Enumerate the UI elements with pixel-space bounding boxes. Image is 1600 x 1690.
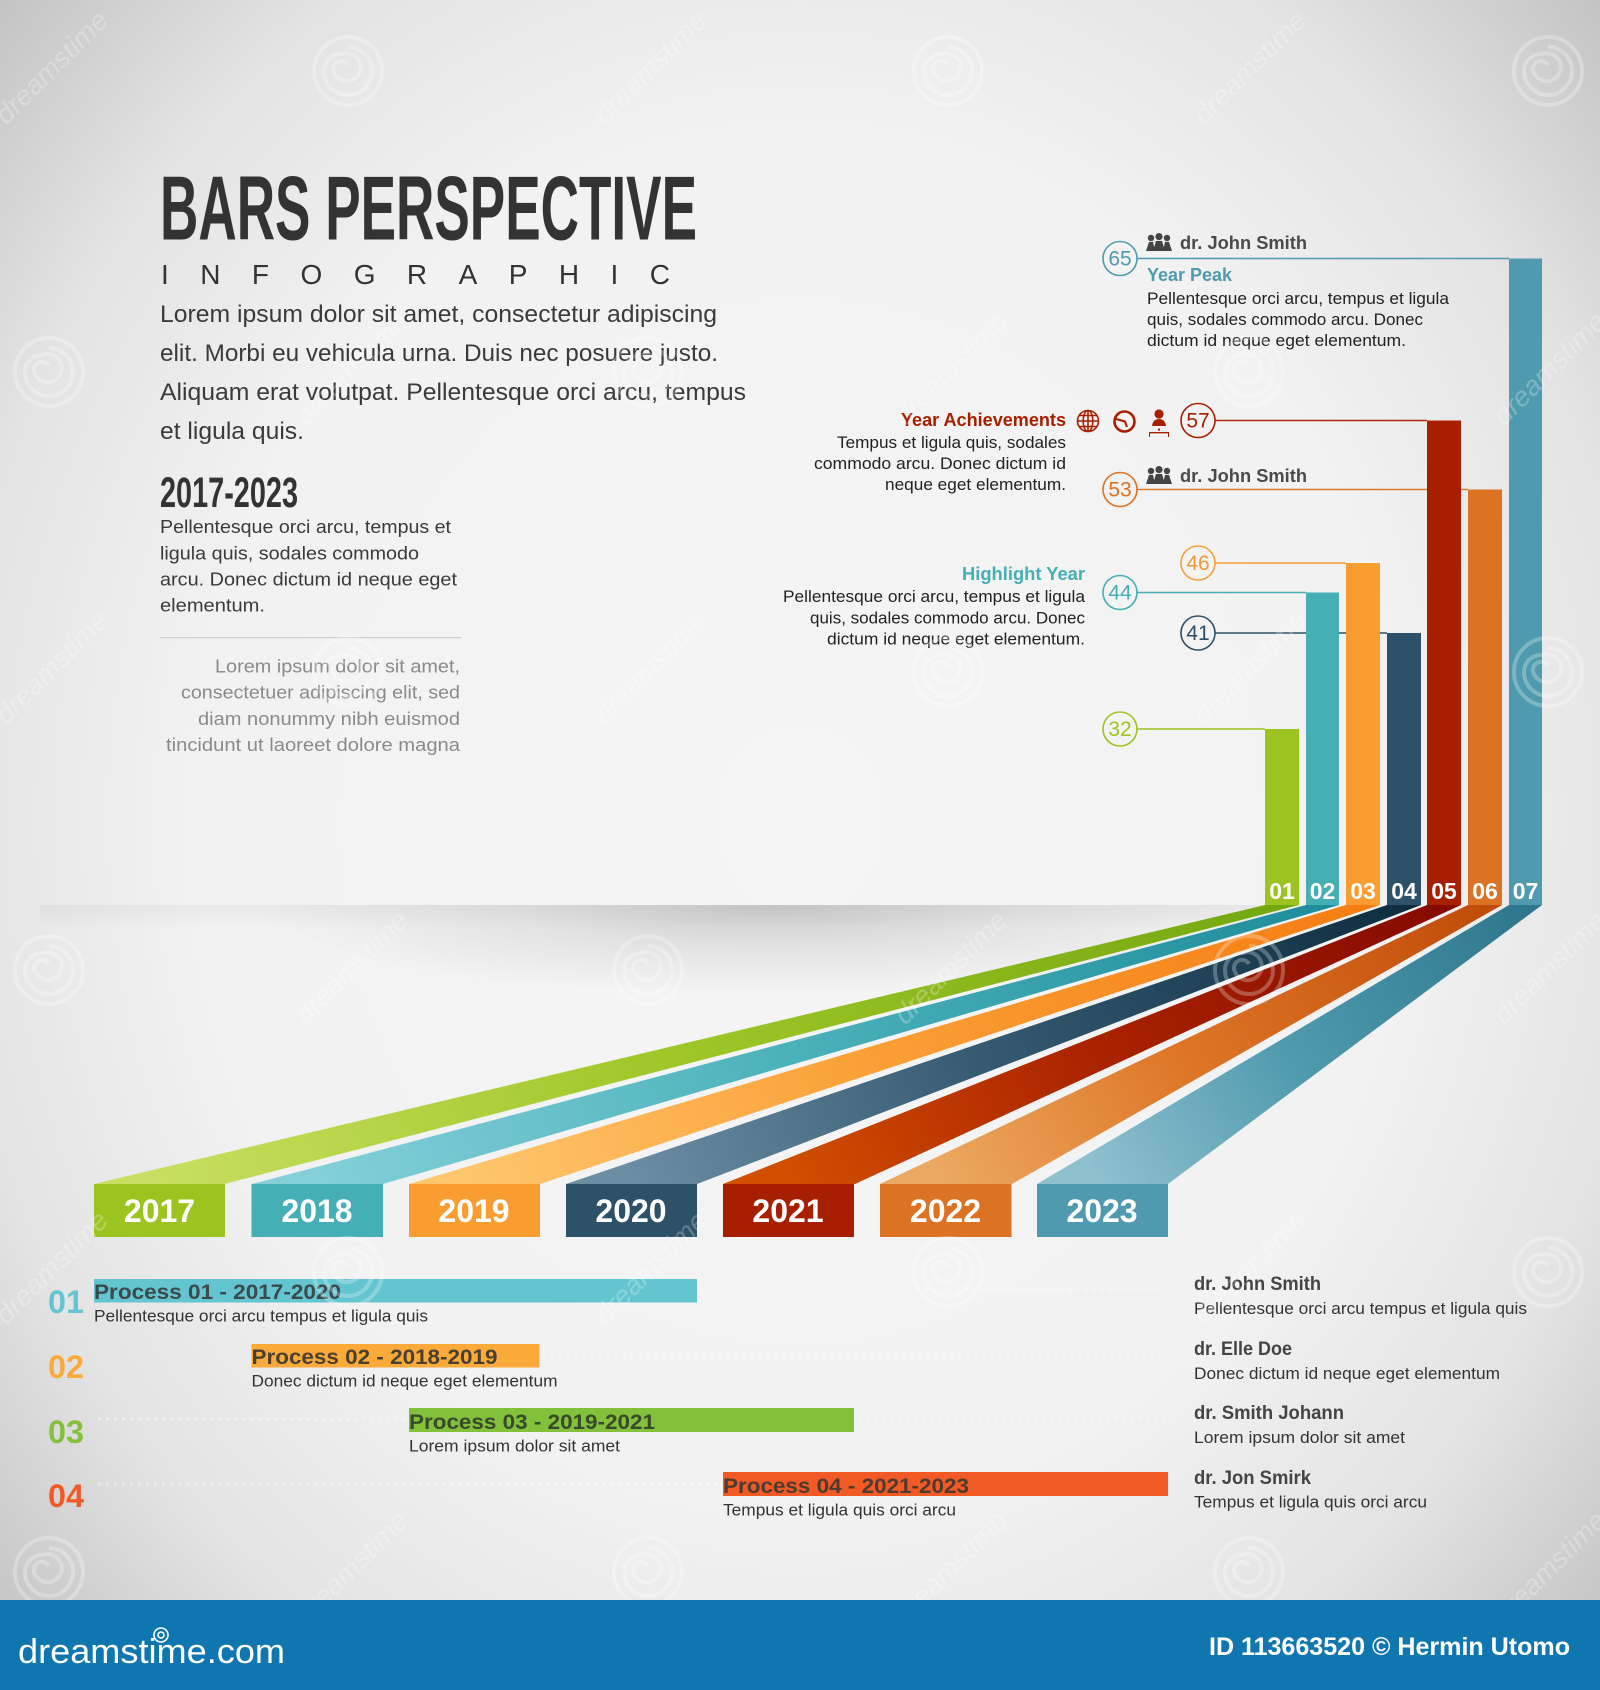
callout: dr. John Smith, Year Peak <box>1146 232 1450 350</box>
bar 07: 07 <box>1513 878 1538 904</box>
tab 2018 <box>252 1184 383 1237</box>
tab 2020 <box>566 1184 697 1237</box>
intro paragraph <box>160 301 746 445</box>
value badge 65: 65 <box>1108 248 1132 270</box>
tab 2021: 2021 <box>752 1193 824 1229</box>
description: quis, sodales commodo arcu. Donec <box>1147 311 1423 329</box>
watermark: dreamstime <box>888 306 1013 431</box>
bar 02: 02 <box>1310 878 1335 904</box>
description: Pellentesque orci arcu, tempus et ligula <box>1147 290 1450 308</box>
person 3: Lorem ipsum dolor sit amet <box>1194 1429 1405 1447</box>
bar 02 <box>1306 592 1339 905</box>
description: quis, sodales commodo arcu. Donec <box>810 610 1085 628</box>
person 3: dr. Smith Johann <box>1194 1403 1344 1424</box>
callout: Highlight Year <box>783 563 1086 648</box>
bar 06 <box>1468 490 1502 905</box>
watermark: dreamstime <box>888 1505 1013 1630</box>
panel edge shadow <box>40 905 1400 1005</box>
bar 01 <box>1265 729 1299 905</box>
icon: globe <box>1078 410 1098 432</box>
watermark: dreamstime <box>588 605 713 730</box>
person 1 <box>1194 1274 1527 1318</box>
process text: Pellentesque orci arcu tempus et ligula quis <box>94 1308 428 1326</box>
process text: Lorem ipsum dolor sit amet <box>409 1438 620 1456</box>
description <box>1147 290 1450 350</box>
value badge 57 <box>1181 404 1215 438</box>
vertical bar chart <box>1265 258 1542 905</box>
process label: Process 02 - 2018-2019 <box>252 1346 498 1369</box>
value badge 57: 57 <box>1186 410 1210 432</box>
row number: 01 <box>48 1284 84 1320</box>
description: neque eget elementum. <box>885 476 1066 494</box>
person 3 <box>1194 1403 1405 1447</box>
watermark: dreamstime <box>1187 1205 1312 1330</box>
value badge 44 <box>1103 576 1137 610</box>
tab 2023: 2023 <box>1066 1193 1138 1229</box>
icon: people <box>1146 466 1172 484</box>
bar 05: 05 <box>1431 878 1457 904</box>
description: dictum id neque eget elementum. <box>827 630 1085 648</box>
person 2: dr. Elle Doe <box>1194 1339 1292 1360</box>
bar 03: 03 <box>1350 878 1376 904</box>
title: BARS PERSPECTIVE <box>160 158 697 260</box>
process row 04 <box>48 1472 1168 1520</box>
value badge 32: 32 <box>1108 718 1132 741</box>
date range text: ligula quis, sodales commodo <box>160 542 419 564</box>
watermark: dreamstime <box>289 306 414 431</box>
value badge 53: 53 <box>1108 478 1132 502</box>
process label: Process 04 - 2021-2023 <box>723 1475 969 1498</box>
tab 2018: 2018 <box>281 1193 353 1229</box>
process label: Process 01 - 2017-2020 <box>94 1281 341 1304</box>
icon: logo spiral <box>154 1628 168 1642</box>
date range heading: 2017-2023 <box>160 469 298 517</box>
row number: 04 <box>48 1478 84 1514</box>
description: Tempus et ligula quis, sodales <box>837 434 1066 452</box>
name: dr. John Smith <box>1180 232 1307 253</box>
tab 2022: 2022 <box>910 1193 981 1229</box>
bar 04: 04 <box>1391 878 1417 904</box>
process bar <box>723 1472 1168 1496</box>
year tabs <box>94 1184 1168 1237</box>
icon: user at desk <box>1149 409 1169 437</box>
bar 03 <box>1346 563 1380 905</box>
date range text <box>160 516 457 616</box>
value badge 41: 41 <box>1186 622 1210 645</box>
row number: 03 <box>48 1414 84 1450</box>
process label: Process 03 - 2019-2021 <box>409 1411 655 1434</box>
name: dr. John Smith <box>1180 465 1307 486</box>
value badge 32 <box>1103 712 1137 746</box>
icon: people <box>1146 233 1172 251</box>
person 1: Pellentesque orci arcu tempus et ligula quis <box>1194 1300 1527 1318</box>
tab 2022 <box>880 1184 1012 1237</box>
person 1: dr. John Smith <box>1194 1274 1321 1295</box>
tab 2021 <box>723 1184 854 1237</box>
icon: clock <box>1114 412 1134 432</box>
tab 2023 <box>1037 1184 1168 1237</box>
process bar <box>409 1408 854 1432</box>
process bar <box>94 1279 697 1302</box>
footer bar <box>0 1600 1600 1690</box>
person 4: Tempus et ligula quis orci arcu <box>1194 1494 1427 1512</box>
process text: Donec dictum id neque eget elementum <box>252 1372 558 1390</box>
value badge 46: 46 <box>1186 552 1210 575</box>
grey quote text: tincidunt ut laoreet dolore magna <box>166 734 461 755</box>
subtitle: INFOGRAPHIC <box>161 259 670 290</box>
process text: Tempus et ligula quis orci arcu <box>723 1502 956 1520</box>
watermark: dreamstime <box>289 1505 414 1630</box>
people list <box>1194 1274 1527 1512</box>
value badge 53 <box>1103 472 1137 506</box>
description <box>814 434 1066 494</box>
description: Pellentesque orci arcu, tempus et ligula <box>783 588 1086 606</box>
watermark: dreamstime <box>588 1205 713 1330</box>
date range text: elementum. <box>160 594 265 616</box>
value badge 44: 44 <box>1108 582 1132 604</box>
watermark: dreamstime <box>888 905 1013 1030</box>
person 2: Donec dictum id neque eget elementum <box>1194 1365 1500 1383</box>
callout: dr. John Smith second <box>1146 465 1307 486</box>
date range text: arcu. Donec dictum id neque eget <box>160 568 457 590</box>
description: dictum id neque eget elementum. <box>1147 332 1406 350</box>
description: commodo arcu. Donec dictum id <box>814 455 1066 473</box>
person 4 <box>1194 1468 1427 1512</box>
process bar <box>252 1344 540 1368</box>
description <box>783 588 1086 648</box>
value badge 41 <box>1181 616 1215 650</box>
intro paragraph: elit. Morbi eu vehicula urna. Duis nec posuere justo. <box>160 340 718 367</box>
bar 05 <box>1427 420 1461 905</box>
value badge 46 <box>1181 546 1215 580</box>
date range text: Pellentesque orci arcu, tempus et <box>160 516 451 537</box>
person 2 <box>1194 1339 1500 1383</box>
callout leader lines <box>1137 258 1509 729</box>
bar 07 <box>1509 258 1542 905</box>
grey quote text: consectetuer adipiscing elit, sed <box>181 682 460 702</box>
person 4: dr. Jon Smirk <box>1194 1468 1311 1489</box>
bar 01: 01 <box>1269 878 1295 904</box>
tab 2017: 2017 <box>124 1193 195 1229</box>
grey quote text <box>166 656 461 755</box>
watermark: dreamstime <box>588 5 713 130</box>
perspective ribbons <box>94 905 1542 1184</box>
intro paragraph: et ligula quis. <box>160 418 304 445</box>
row number: 02 <box>48 1349 84 1385</box>
intro paragraph: Lorem ipsum dolor sit amet, consectetur adipiscing <box>160 301 717 328</box>
heading: Year Achievements <box>901 409 1066 430</box>
tab 2019 <box>409 1184 540 1237</box>
tab 2017 <box>94 1184 225 1237</box>
tab 2020: 2020 <box>595 1193 667 1229</box>
value badge 65 <box>1103 242 1137 276</box>
grey quote text: diam nonummy nibh euismod <box>198 708 460 729</box>
heading: Year Peak: Year Peak <box>1147 264 1233 285</box>
heading: Highlight Year <box>962 563 1085 584</box>
watermark: dreamstime <box>289 905 414 1030</box>
process row 01 <box>48 1279 697 1326</box>
footer logo: dreamstime.com <box>18 1633 285 1671</box>
process row 02 <box>48 1344 558 1390</box>
tab 2019: 2019 <box>438 1193 510 1229</box>
grey quote text: Lorem ipsum dolor sit amet, <box>215 656 460 676</box>
bar 04 <box>1387 633 1421 905</box>
callout: Year Achievements <box>814 409 1169 494</box>
bar 06: 06 <box>1472 878 1498 904</box>
process row 03 <box>48 1408 854 1456</box>
intro paragraph: Aliquam erat volutpat. Pellentesque orci arcu, tempus <box>160 379 746 406</box>
image credit: ID 113663520 © Hermin Utomo <box>1209 1633 1570 1661</box>
watermark: dreamstime <box>1187 5 1312 130</box>
watermark: dreamstime <box>1187 605 1312 730</box>
